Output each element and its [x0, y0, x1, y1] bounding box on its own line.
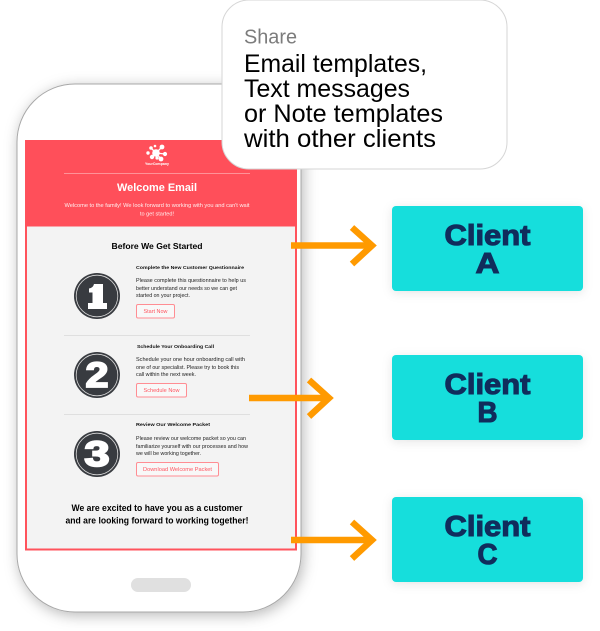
client card C: C: [478, 539, 498, 571]
badge 3: 3: [84, 435, 110, 474]
badge 3: [74, 431, 120, 477]
welcome text: [64, 203, 250, 218]
home button: [131, 578, 191, 592]
button: [136, 462, 218, 476]
step 3: Please review our welcome packet so you can: [136, 436, 246, 442]
step 3: [74, 422, 248, 477]
client card B: [392, 355, 583, 440]
button: [136, 304, 174, 318]
button: Download Welcome Packet: [143, 467, 213, 473]
callout text: or Note templates: [244, 100, 443, 128]
step 1: better understand our needs so we can get: [136, 286, 238, 292]
company logo: YourCompany: [145, 162, 170, 166]
client card A: A: [476, 248, 500, 280]
phone body: [17, 84, 301, 612]
callout text: [243, 50, 443, 153]
company logo: [145, 145, 170, 166]
step 2: call within the next week.: [136, 372, 196, 378]
step 3: Review Our Welcome Packet: [136, 422, 210, 428]
welcome text: to get started!: [140, 212, 175, 218]
arrow to client B: [249, 380, 329, 416]
client card C: [392, 497, 583, 582]
client card B: Client: [444, 369, 531, 401]
step 2: Schedule your one hour onboarding call with: [136, 357, 245, 363]
closing message: and are looking forward to working together!: [66, 516, 249, 526]
step 1: Please complete this questionnaire to help us: [136, 278, 246, 284]
client card C: Client: [444, 511, 531, 543]
email title: Welcome Email: [117, 182, 197, 194]
callout text: Text messages: [244, 75, 410, 103]
closing message: [66, 503, 249, 526]
step 3: familiarize yourself with our processes and how: [136, 444, 248, 450]
badge 2: [74, 352, 120, 398]
closing message: We are excited to have you as a customer: [72, 503, 243, 513]
step 2: [74, 344, 245, 398]
button: Start Now: [144, 309, 168, 315]
phone: [17, 84, 301, 612]
arrow to client C: [291, 522, 372, 558]
email header: [26, 140, 296, 226]
step 2: Schedule Your Onboarding Call: [137, 344, 215, 350]
button: [136, 384, 186, 397]
button: Schedule Now: [144, 388, 180, 394]
callout text: Email templates,: [244, 50, 427, 78]
callout label: Share: [244, 26, 297, 48]
arrow to client A: [291, 228, 372, 264]
client card A: Client: [444, 220, 531, 252]
email screen: [26, 140, 296, 550]
client card A: [392, 206, 583, 291]
badge 2: 2: [86, 356, 108, 395]
step 1: Complete the New Customer Questionnaire: [136, 265, 244, 271]
section heading: Before We Get Started: [112, 241, 202, 251]
step 1: [74, 265, 246, 319]
step 2: one of our specialist. Please try to book this: [136, 365, 239, 371]
badge 1: [74, 273, 120, 319]
client card B: B: [478, 397, 498, 429]
step 3: we will be working together.: [136, 451, 201, 457]
callout: share: [222, 0, 507, 169]
callout text: with other clients: [243, 125, 436, 153]
welcome text: Welcome to the family! We look forward to working with you and can't wait: [64, 203, 250, 209]
step 1: started on your project.: [136, 293, 190, 299]
